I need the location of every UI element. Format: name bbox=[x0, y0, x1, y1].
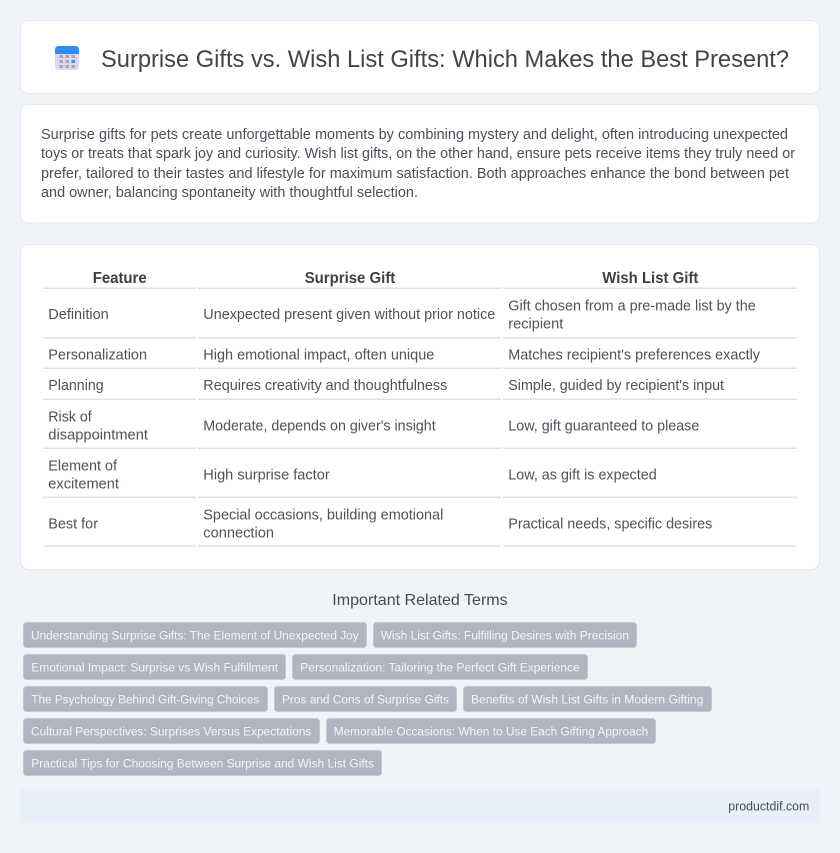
table header row: Feature bbox=[93, 270, 147, 287]
footer: productdif.com bbox=[728, 800, 809, 814]
chip bbox=[24, 718, 320, 744]
row: planning: Simple, guided by recipient's input bbox=[508, 378, 724, 394]
row: personalization: Personalization bbox=[48, 348, 147, 364]
chip bbox=[374, 622, 636, 648]
row: element of excitement: High surprise factor bbox=[203, 468, 330, 484]
row: best for: connection bbox=[203, 526, 274, 542]
row: planning: Requires creativity and thoughtfulness bbox=[203, 378, 447, 394]
panel: introduction text bbox=[20, 104, 820, 223]
table header row: Wish List Gift bbox=[602, 270, 699, 287]
table header row bbox=[43, 270, 797, 289]
chip bbox=[24, 654, 286, 680]
row: element of excitement: Element of bbox=[48, 458, 118, 474]
row: best for: Best for bbox=[48, 516, 98, 532]
panel: header bbox=[20, 20, 820, 94]
chip: Emotional Impact: Surprise vs Wish Fulfillment bbox=[31, 660, 279, 674]
row: definition: recipient bbox=[508, 316, 563, 332]
chip: Memorable Occasions: When to Use Each Gifting Approach bbox=[334, 724, 648, 738]
row: personalization: Matches recipient's preferences exactly bbox=[508, 348, 761, 364]
row: element of excitement: Low, as gift is expected bbox=[508, 468, 657, 484]
chip: Wish List Gifts: Fulfilling Desires with Precision bbox=[381, 628, 629, 642]
panel: introduction text: and owner, balancing spontaneity with thoughtful selection. bbox=[41, 185, 418, 201]
row: planning: Planning bbox=[48, 378, 104, 394]
row: personalization: High emotional impact, often unique bbox=[203, 348, 434, 364]
row: planning bbox=[43, 378, 797, 400]
panel: related term chips bbox=[24, 622, 712, 776]
chip: Personalization: Tailoring the Perfect Gift Experience bbox=[300, 660, 580, 674]
chip bbox=[274, 686, 456, 712]
row: element of excitement bbox=[43, 458, 797, 498]
title: Surprise Gifts vs. Wish List Gifts: Which Makes the Best Present? bbox=[101, 46, 789, 73]
chip: The Psychology Behind Gift-Giving Choices bbox=[31, 692, 259, 706]
panel: introduction text: Surprise gifts for pets create unforgettable moments by combining mystery and delight, often introducing unexpected bbox=[41, 127, 788, 143]
chip bbox=[326, 718, 656, 744]
row: definition: Definition bbox=[48, 307, 109, 323]
row: best for: Special occasions, building emotional bbox=[203, 508, 443, 524]
panel: introduction text: prefer, tailored to their tastes and lifestyle for maximum satisfaction. Both approaches enhance the bond between pet bbox=[41, 166, 789, 182]
panel: comparison table bbox=[20, 244, 820, 570]
row: definition: Gift chosen from a pre-made list by the bbox=[508, 298, 756, 314]
row: risk of disappointment: disappointment bbox=[48, 428, 148, 444]
chip bbox=[464, 686, 712, 712]
footer bbox=[20, 789, 820, 823]
panel: introduction text: toys or treats that spark joy and curiosity. Wish list gifts, on the other hand, ensure pets receive items they truly need or bbox=[41, 146, 795, 162]
chip bbox=[24, 750, 382, 776]
table header row: Surprise Gift bbox=[305, 270, 396, 287]
chip: Cultural Perspectives: Surprises Versus Expectations bbox=[31, 724, 311, 738]
chip bbox=[24, 622, 366, 648]
chip: Pros and Cons of Surprise Gifts bbox=[282, 692, 449, 706]
row: personalization bbox=[43, 348, 797, 369]
icon: calendar bbox=[55, 46, 79, 70]
chip: Benefits of Wish List Gifts in Modern Gifting bbox=[471, 692, 703, 706]
row: element of excitement: excitement bbox=[48, 476, 119, 492]
row: definition: Unexpected present given without prior notice bbox=[203, 307, 495, 323]
heading: important related terms: Important Related Terms bbox=[332, 592, 508, 609]
row: risk of disappointment: Risk of bbox=[48, 410, 93, 426]
row: best for: Practical needs, specific desires bbox=[508, 516, 712, 532]
row: risk of disappointment: Moderate, depends on giver's insight bbox=[203, 418, 436, 434]
chip: Practical Tips for Choosing Between Surprise and Wish List Gifts bbox=[31, 756, 374, 770]
chip bbox=[292, 654, 588, 680]
row: risk of disappointment: Low, gift guaranteed to please bbox=[508, 418, 699, 434]
row: best for bbox=[43, 508, 797, 547]
row: risk of disappointment bbox=[43, 410, 797, 449]
chip: Understanding Surprise Gifts: The Element of Unexpected Joy bbox=[31, 628, 360, 642]
row: definition bbox=[43, 298, 797, 338]
chip bbox=[24, 686, 268, 712]
